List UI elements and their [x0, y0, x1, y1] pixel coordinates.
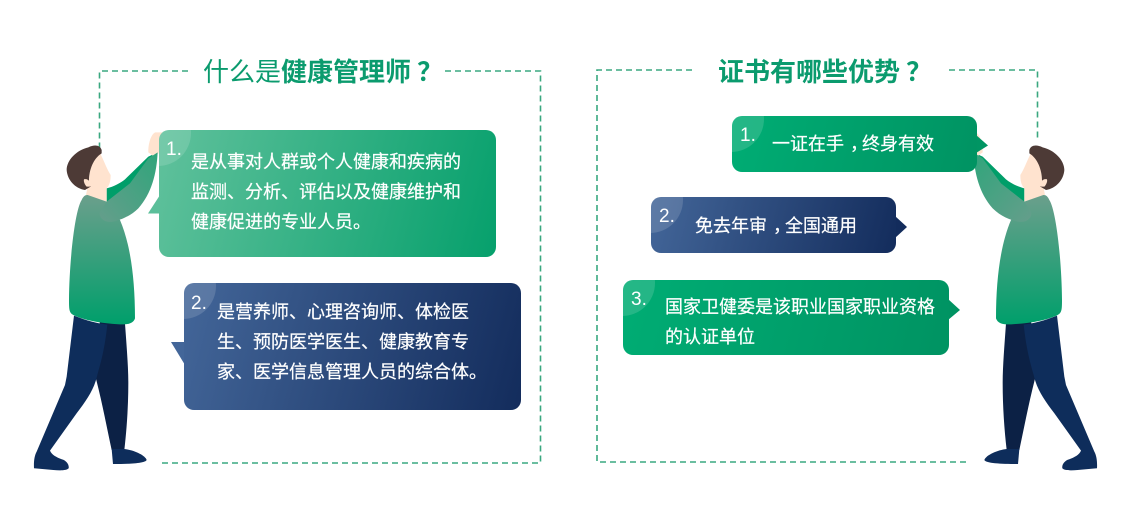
- panel: right bubble 1: [732, 116, 977, 172]
- panel: right bubble 1: 1.: [740, 125, 756, 146]
- pointer: right bubble 3: [948, 299, 960, 320]
- panel: right bubble 2: [651, 197, 896, 253]
- panel: right bubble 3: 的认证单位: [665, 327, 755, 347]
- heading: what is a health manager: 什么是健康管理师？: [203, 57, 443, 87]
- panel: right bubble 1: 一证在手 ，终身有效: [772, 134, 934, 154]
- heading: certificate advantages: 证书有哪些优势？: [718, 57, 932, 87]
- panel: right bubble 2: 免去年审 ，全国通用: [695, 216, 857, 236]
- panel: left bubble 1: 健康促进的专业人员。: [191, 212, 371, 232]
- panel: left bubble 1: [159, 130, 496, 257]
- panel: left bubble 2: [184, 283, 521, 410]
- panel: right bubble 2: 2.: [659, 206, 675, 227]
- figure: right man reaching up: [968, 132, 1097, 470]
- pointer: right bubble 1: [976, 135, 988, 153]
- panel: right bubble 3: 3.: [631, 289, 647, 310]
- panel: left bubble 2: 生、预防医学医生、健康教育专: [217, 332, 469, 352]
- panel: left bubble 1: 是从事对人群或个人健康和疾病的: [191, 152, 461, 172]
- left dashed frame: [100, 71, 540, 463]
- pointer: left bubble 2: [171, 342, 185, 365]
- panel: right bubble 3: 国家卫健委是该职业国家职业资格: [665, 297, 935, 317]
- pointer: left bubble 1: [148, 195, 160, 214]
- right dashed frame: [597, 70, 1038, 462]
- panel: left bubble 2: 2.: [191, 293, 207, 314]
- panel: right bubble 3: [623, 280, 949, 355]
- figure: left man reaching up: [34, 132, 163, 470]
- panel: left bubble 1: 1.: [166, 139, 182, 160]
- panel: left bubble 2: 家、医学信息管理人员的综合体。: [217, 362, 487, 382]
- panel: left bubble 1: 监测、分析、评估以及健康维护和: [191, 182, 461, 202]
- panel: left bubble 2: 是营养师、心理咨询师、体检医: [217, 302, 469, 322]
- pointer: right bubble 2: [895, 216, 907, 238]
